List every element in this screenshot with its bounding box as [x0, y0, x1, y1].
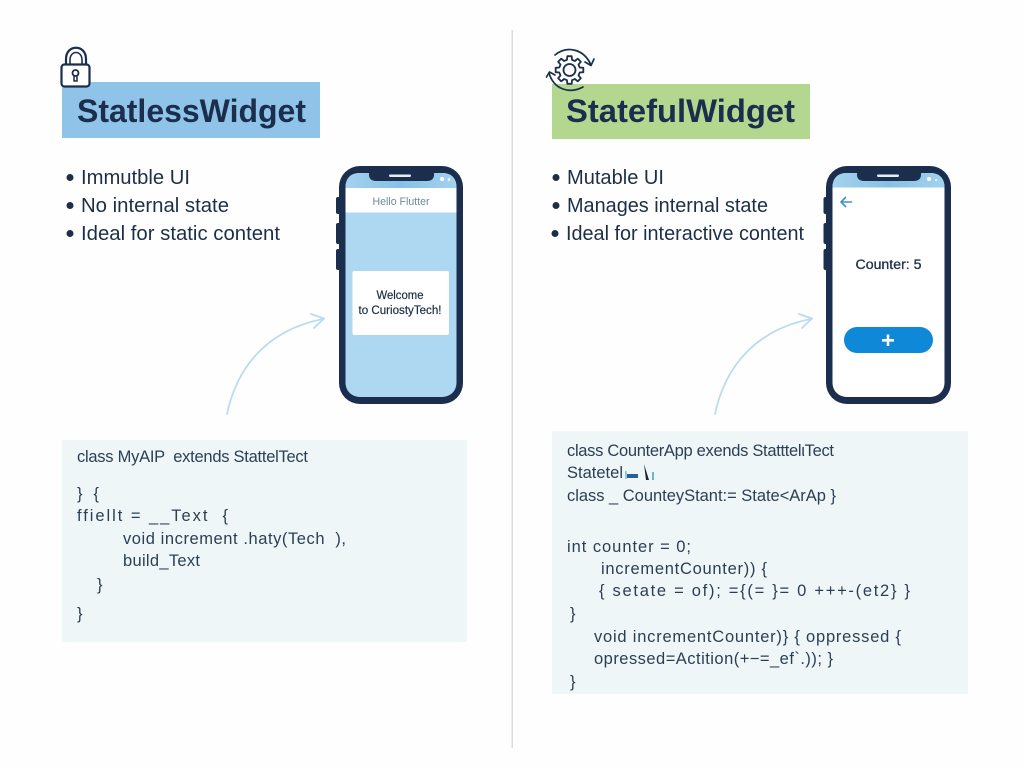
feature list: stateful: Mutable UI	[567, 167, 664, 189]
heading: StatefulWidget	[552, 84, 810, 139]
increment button	[844, 327, 933, 353]
code block: stateless: } {	[77, 485, 99, 503]
code block: stateful: }	[570, 673, 576, 691]
code block: stateful: Statetel	[567, 464, 623, 482]
code block: stateful: opressed=Actition(+−=_ef`.)); }	[594, 650, 833, 668]
icon: back arrow	[841, 198, 852, 206]
heading: StatelessWidget: StatlessWidget	[77, 93, 306, 129]
heading: StatelessWidget	[62, 82, 320, 138]
code block: stateful: void incrementCounter)} { oppressed {	[594, 628, 901, 646]
code block: stateful: int counter = 0;	[567, 538, 691, 556]
icon: gear with cycle arrows	[546, 50, 594, 90]
feature list: stateless: No internal state	[81, 195, 229, 217]
phone: Hello Flutter app	[336, 166, 463, 404]
arrow: to stateless phone	[227, 314, 324, 414]
feature list: stateless: Ideal for static content	[81, 223, 280, 245]
arrow: to stateful phone	[715, 314, 812, 414]
code block: stateful: class _ CounteyStant:= State<ArAp }	[567, 487, 836, 505]
welcome card: Welcome	[376, 290, 424, 302]
code block: stateless: }	[97, 576, 103, 594]
code block: stateful	[552, 431, 968, 694]
code block: stateless: void increment .haty(Tech ),	[123, 530, 346, 548]
code block: stateless	[62, 440, 467, 642]
phone: counter app	[824, 166, 951, 404]
panel: StatelessWidget	[62, 48, 467, 642]
code block: stateless: class MyAIP extends StattelTect	[77, 448, 308, 466]
code block: stateful: { setate = of); ={(= }= 0 +++-(et2} }	[599, 582, 910, 600]
feature list: stateful: Manages internal state	[567, 195, 768, 217]
panel: StatefulWidget	[546, 50, 968, 694]
counter label: Counter: 5	[856, 257, 922, 272]
code block: stateful: class CounterApp exends StatttelιTect	[567, 442, 834, 460]
code block: stateful: incrementCounter)) {	[601, 560, 767, 578]
welcome card: to CuriostyTech!	[358, 305, 442, 317]
feature list: stateful	[552, 167, 804, 245]
code glitch smudge	[625, 464, 654, 480]
feature list: stateless: Immutble UI	[81, 167, 190, 189]
app bar: Hello Flutter	[372, 196, 430, 208]
code block: stateless: build_Text	[123, 552, 200, 570]
code block: stateful: }	[570, 605, 576, 623]
feature list: stateless	[66, 167, 280, 245]
icon: padlock	[62, 48, 90, 86]
code block: stateless: }	[77, 605, 83, 623]
app bar	[346, 188, 456, 212]
heading: StatefulWidget: StatefulWidget	[566, 93, 795, 129]
code block: stateless: ffiellt = __Text {	[77, 507, 228, 525]
welcome card	[352, 271, 449, 335]
feature list: stateful: Ideal for interactive content	[566, 223, 804, 245]
